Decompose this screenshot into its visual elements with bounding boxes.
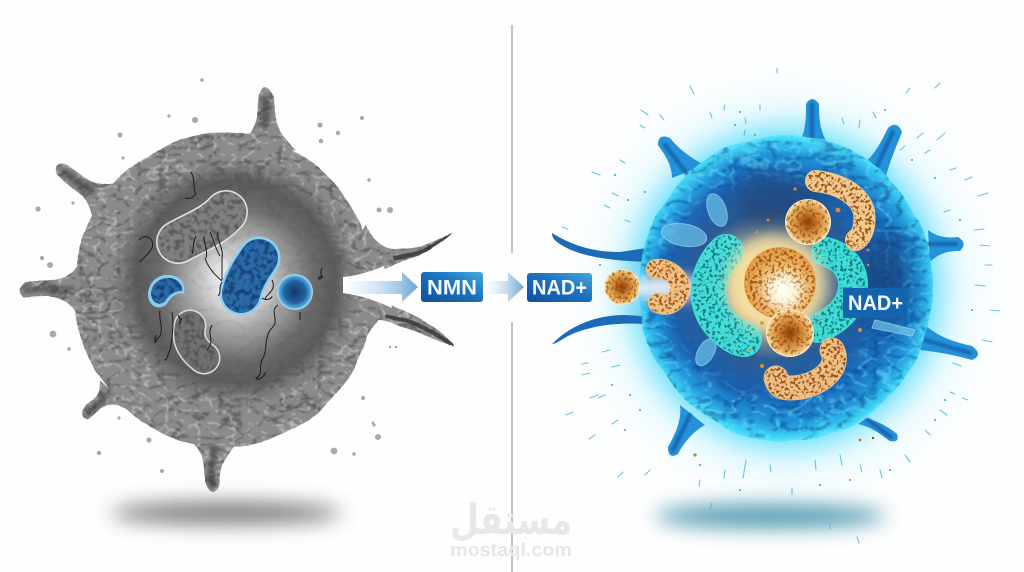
light beam: entry channel xyxy=(626,275,710,301)
notch: opening on the right side of the cell xyxy=(343,266,392,308)
sparks: radial streaks xyxy=(562,68,1000,543)
particles: grey debris xyxy=(35,78,397,473)
label: NAD+ inside cell xyxy=(843,288,907,318)
panel: aged grey cell xyxy=(19,78,455,492)
organelle: entering bean xyxy=(656,269,680,305)
organelle: blue sphere right xyxy=(277,274,313,310)
cell body: grey membrane with spikes xyxy=(19,87,455,492)
organelle: orange sphere bottom xyxy=(766,309,814,357)
organelle: grey mitochondrion lower xyxy=(189,326,204,358)
filaments: black strands xyxy=(139,172,322,379)
label: NMN: NMN xyxy=(427,276,477,300)
sparks: fine dots xyxy=(599,109,973,491)
organelle: orange bean top right xyxy=(816,181,865,240)
watermark: mostaql: مستقل xyxy=(450,495,572,544)
label: NAD+ inside cell: NAD+ xyxy=(848,292,903,315)
cell body: blue membrane xyxy=(630,130,940,450)
organelle: glowing core xyxy=(725,234,825,334)
organelle: blue mitochondrion centre xyxy=(241,258,259,294)
ground shadow: left cell xyxy=(111,502,341,524)
organelle: entering sphere xyxy=(604,269,640,305)
orange flecks xyxy=(749,187,869,368)
arrow: cell to NMN xyxy=(345,272,418,302)
organelle: orange bean bottom right xyxy=(776,350,834,388)
arrow: NMN to NAD+ xyxy=(486,272,524,302)
divider: vertical line xyxy=(511,25,513,572)
organelle: teal mitochondrion left xyxy=(709,252,744,339)
label: NMN xyxy=(421,272,483,302)
glow: cyan halo xyxy=(611,108,961,468)
organelles: pale blue vesicles xyxy=(659,191,915,369)
label: NAD+ entering: NAD+ xyxy=(532,276,587,300)
tails: curved blue projections xyxy=(552,233,660,344)
watermark: mostaql xyxy=(450,495,572,560)
watermark: mostaql: mostaql.com xyxy=(450,540,572,560)
organelle: grey mitochondrion upper xyxy=(178,212,226,242)
panel: energised blue cell xyxy=(552,68,1000,543)
organelle: blue fragment left xyxy=(148,275,184,307)
ground shadow: right cell xyxy=(655,504,885,528)
organelle: teal mitochondrion right xyxy=(818,252,853,328)
spikes: blue membrane projections xyxy=(658,99,978,456)
organelle: orange sphere top xyxy=(785,199,831,245)
